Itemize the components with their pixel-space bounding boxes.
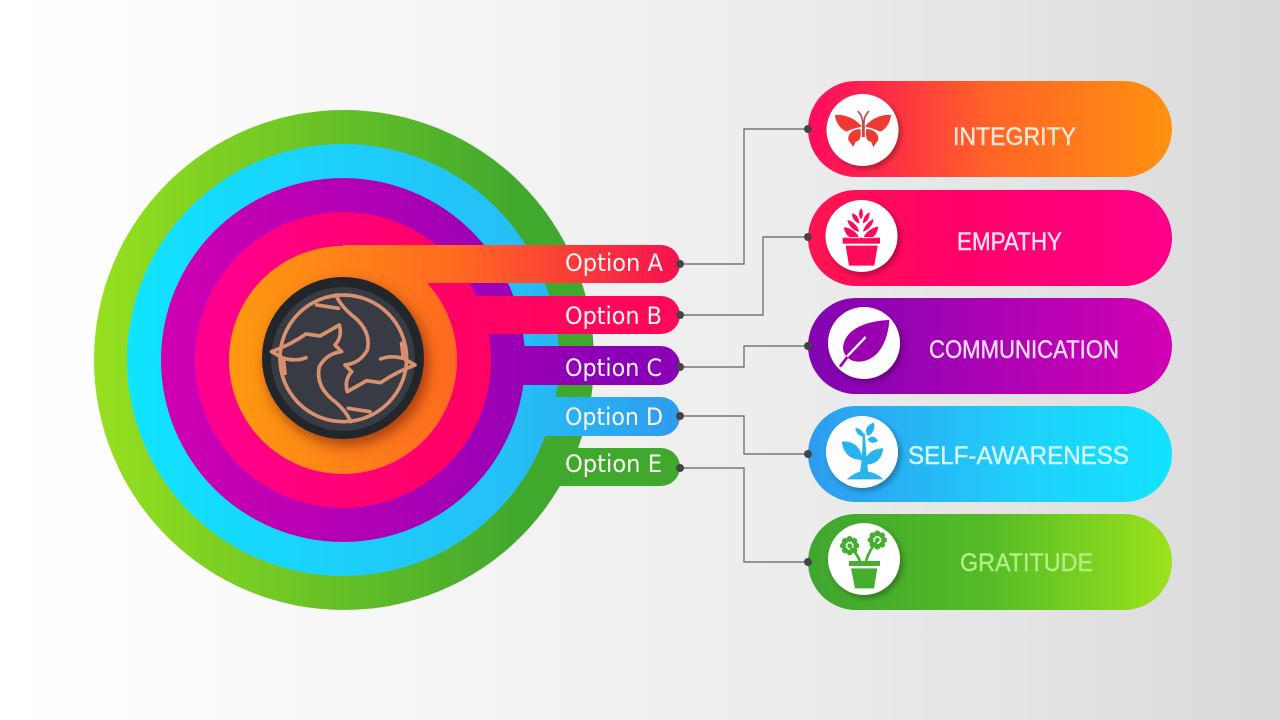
concentric ring diagram <box>94 110 680 610</box>
ring E: green <box>94 110 680 610</box>
option labels: Option D <box>565 403 663 431</box>
label: self-awareness: SELF-AWARENESS <box>908 442 1129 470</box>
left flower <box>840 536 859 555</box>
pill: integrity <box>808 81 1172 177</box>
connector dots <box>676 260 684 472</box>
right flower <box>868 530 887 550</box>
option labels <box>565 249 664 478</box>
icon: leaf <box>840 320 889 367</box>
pill: gratitude <box>808 514 1172 610</box>
central logo badge <box>262 277 424 439</box>
pill connector dots <box>804 125 812 566</box>
ring C: purple <box>161 178 680 542</box>
label: integrity: INTEGRITY <box>953 123 1076 151</box>
ring D: cyan <box>127 144 680 576</box>
wolf emblem <box>272 295 415 422</box>
label: communication: COMMUNICATION <box>929 336 1119 364</box>
connector lines <box>680 129 808 562</box>
label: gratitude: GRATITUDE <box>960 549 1093 577</box>
option labels: Option C <box>565 354 662 382</box>
label: empathy: EMPATHY <box>957 228 1062 256</box>
ring A: orange <box>229 245 680 474</box>
icon: butterfly <box>835 111 891 147</box>
icon: seedling <box>842 423 883 479</box>
pill: self-awareness <box>808 406 1172 502</box>
option labels: Option E <box>565 450 662 478</box>
ring B: pink <box>195 212 680 508</box>
option labels: Option A <box>565 249 664 277</box>
icon: flowers in pot <box>840 530 887 588</box>
option labels: Option B <box>565 302 662 330</box>
pill: communication <box>808 298 1172 394</box>
icon: succulent in pot <box>843 207 880 266</box>
pill: empathy <box>808 190 1172 286</box>
